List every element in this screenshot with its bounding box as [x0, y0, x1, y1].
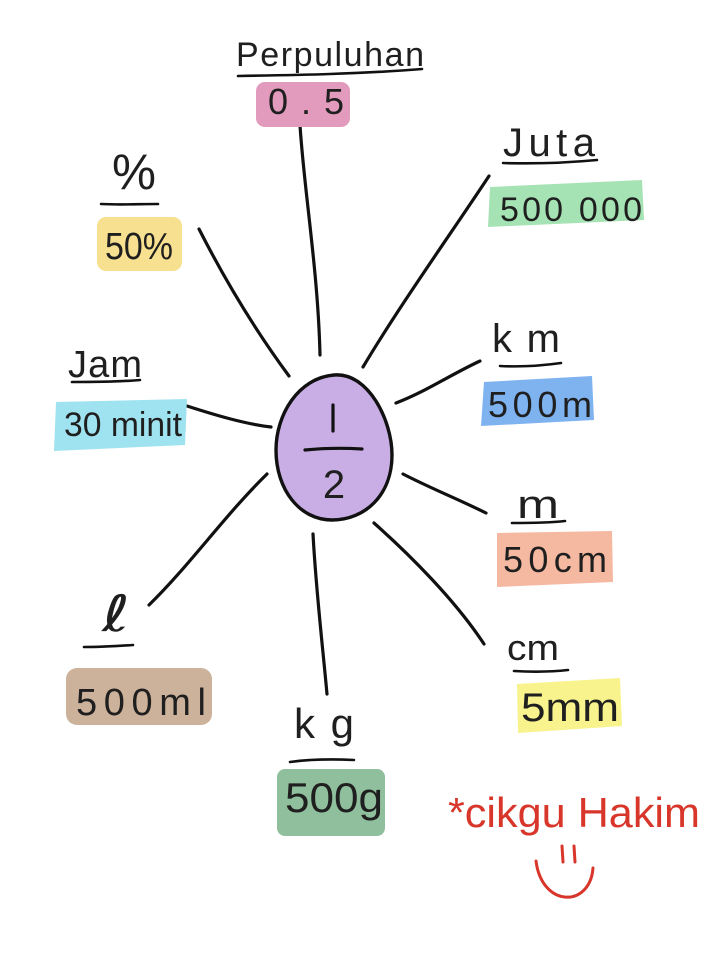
icon: smiley: [536, 846, 593, 897]
node: km 500 m: km: [492, 317, 560, 361]
node: l 500 ml: 500ml: [76, 682, 206, 724]
node: m 50 cm: 50cm: [503, 539, 607, 580]
signature: cikgu Hakim: *cikgu Hakim: [448, 789, 700, 836]
node: Perpuluhan 0.5: [236, 36, 424, 127]
node: % 50%: [97, 144, 182, 271]
node: l 500 ml: [66, 585, 212, 725]
node: km 500 m: [481, 317, 594, 426]
node: kg 500 g: 500g: [285, 774, 383, 821]
node: m 50 cm: [497, 483, 613, 587]
centre node: 1/2: [276, 375, 392, 520]
node: Jam 30 minit: [54, 344, 187, 451]
node: % 50%: 50%: [105, 226, 173, 268]
node: m 50 cm: m: [517, 483, 559, 527]
node: Juta 500 000: Juta: [503, 121, 596, 165]
node: cm 5 mm: [507, 627, 622, 733]
node: cm 5 mm: cm: [507, 627, 559, 668]
node: kg 500 g: kg: [294, 700, 354, 747]
node: l 500 ml: ℓ: [101, 585, 130, 643]
node: Jam 30 minit: 30 minit: [64, 406, 183, 444]
centre node: 1/2: 2: [323, 463, 345, 507]
node: cm 5 mm: 5mm: [521, 686, 619, 730]
node: km 500 m: 500m: [488, 384, 592, 425]
node: Jam 30 minit: Jam: [68, 344, 142, 386]
node: Juta 500 000: [488, 121, 644, 229]
connector lines: [149, 125, 489, 694]
node: % 50%: %: [112, 144, 156, 200]
node: kg 500 g: [277, 700, 385, 836]
node: Perpuluhan 0.5: 0.5: [268, 81, 344, 122]
node: Perpuluhan 0.5: Perpuluhan: [236, 36, 424, 74]
node: Juta 500 000: 500 000: [500, 191, 642, 229]
